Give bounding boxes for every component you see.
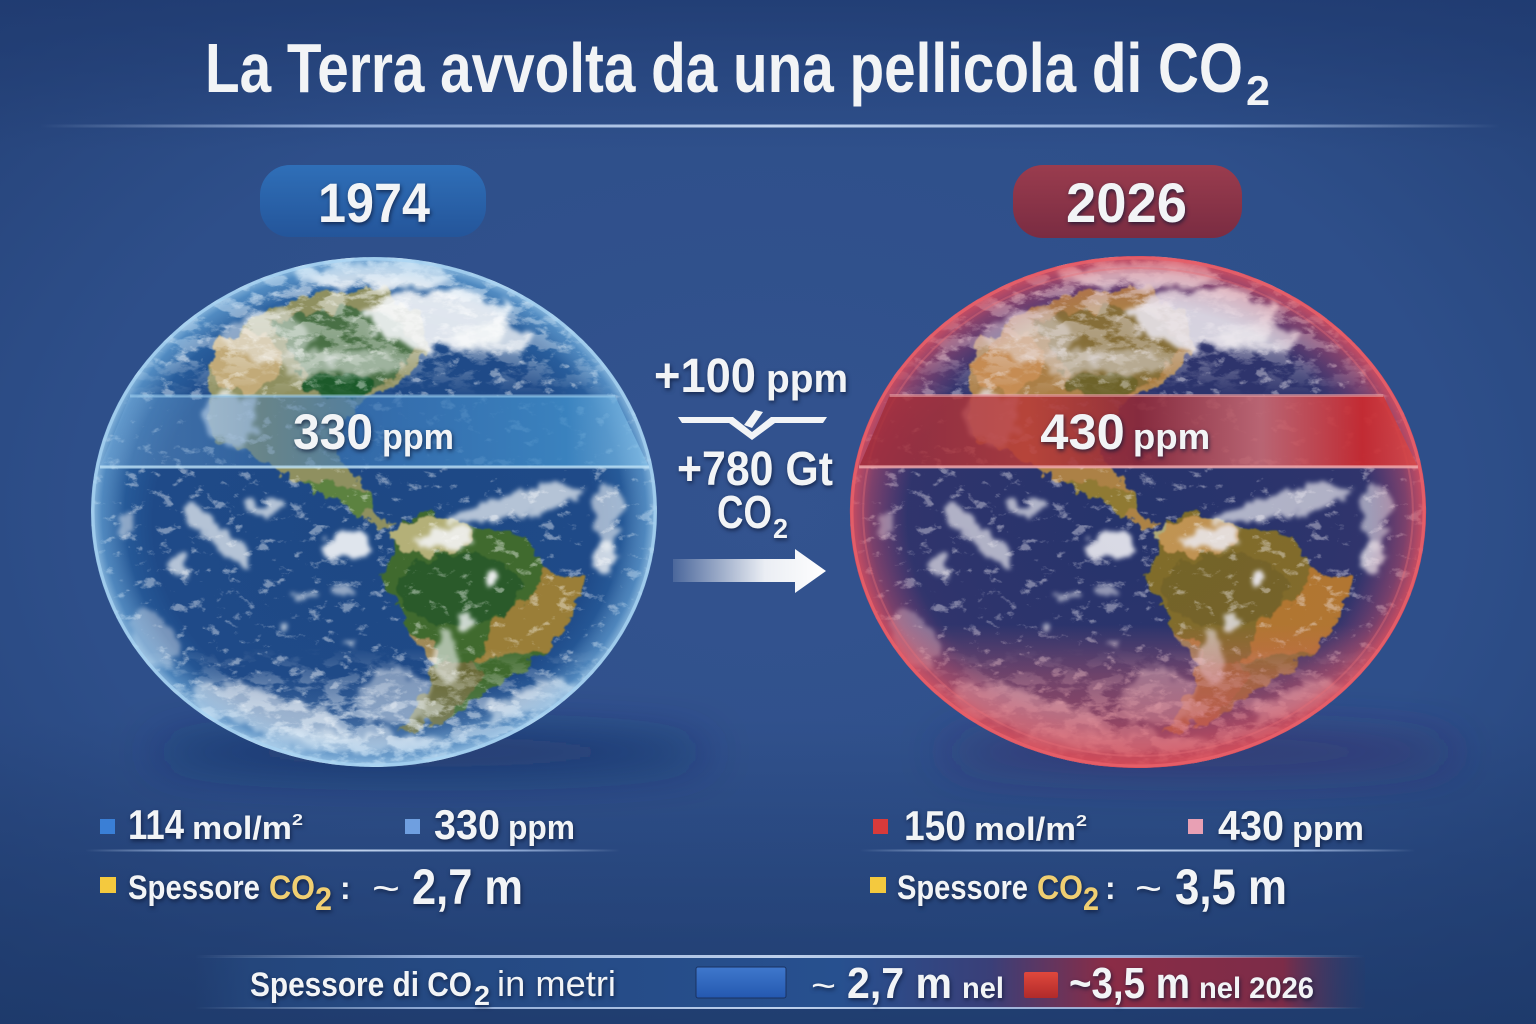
- arrow: [673, 549, 826, 593]
- thickness: :: [1105, 870, 1116, 906]
- value 1974: nel: [962, 972, 1004, 1005]
- ocean: [850, 256, 1426, 768]
- thickness: ~: [1135, 867, 1162, 911]
- value 2026: [1069, 959, 1314, 1008]
- red swatch: [1024, 972, 1058, 998]
- thickness: 2: [315, 881, 332, 917]
- chevron divider: [678, 410, 827, 440]
- mol value: mol/m: [974, 811, 1076, 847]
- ppm value: ppm: [1292, 810, 1364, 848]
- light blue marker: [405, 819, 420, 834]
- bar label: 2: [474, 980, 490, 1011]
- red tint: [850, 256, 1426, 768]
- band value: 330: [293, 404, 373, 460]
- mol value: [904, 802, 1087, 849]
- band value: 430: [1040, 403, 1125, 460]
- ppm value: [434, 801, 575, 848]
- globe 2026: [843, 251, 1433, 773]
- thickness: Spessore: [897, 869, 1028, 907]
- mol value: [128, 801, 303, 848]
- thickness: 3,5 m: [1175, 859, 1287, 915]
- mol value: 2: [1076, 813, 1087, 830]
- thickness: 2,7 m: [412, 859, 523, 915]
- bar label: in metri: [497, 963, 616, 1004]
- mol value: 114: [128, 801, 185, 848]
- year badge 2026: [1013, 165, 1242, 238]
- increase in gigatons: +780 Gt: [677, 443, 833, 496]
- thickness: CO: [269, 869, 315, 907]
- ppm value: [1218, 802, 1364, 849]
- ppm value: ppm: [508, 809, 575, 847]
- thickness: [128, 859, 523, 917]
- thickness: :: [340, 870, 351, 906]
- title: La Terra avvolta da una pellicola di CO: [205, 29, 1243, 107]
- continents and clouds: [843, 251, 1433, 773]
- ppm value: 330: [434, 801, 500, 848]
- ppm value: 430: [1218, 802, 1284, 849]
- globe 1974: [84, 252, 664, 772]
- ground shadows: [150, 734, 1460, 770]
- ppm band: [859, 396, 1418, 467]
- value 2026: ~3,5 m: [1069, 959, 1190, 1008]
- ppm band: [100, 396, 649, 467]
- increase in ppm: +100: [654, 350, 756, 403]
- red marker: [873, 819, 888, 834]
- bottom summary bar: [195, 955, 1365, 1011]
- year badge 2026: 2026: [1066, 171, 1187, 234]
- blue marker: [100, 819, 115, 834]
- continents and clouds: [84, 252, 664, 772]
- mol value: mol/m: [192, 810, 292, 846]
- legend 2026: [860, 802, 1415, 917]
- band value: [293, 404, 454, 460]
- value 2026: nel 2026: [1199, 972, 1314, 1005]
- thickness: [897, 859, 1287, 917]
- mol value: 150: [904, 802, 966, 849]
- year badge 1974: 1974: [318, 171, 430, 234]
- bar label: Spessore di CO: [250, 966, 472, 1004]
- increase in ppm: ppm: [766, 357, 848, 401]
- blue swatch: [696, 967, 786, 998]
- increase in ppm: [654, 350, 848, 403]
- increase in gigatons: [677, 443, 833, 544]
- value 1974: 2,7 m: [847, 959, 952, 1008]
- yellow marker: [870, 877, 886, 893]
- thickness: CO: [1037, 869, 1083, 907]
- yellow marker: [100, 877, 116, 893]
- increase in gigatons: 2: [773, 513, 788, 544]
- central callout: [654, 350, 848, 593]
- bar label: [250, 963, 616, 1011]
- thickness: Spessore: [128, 869, 260, 907]
- band value: [1040, 403, 1210, 460]
- value 1974: ~: [811, 965, 836, 1006]
- year badge 1974: [260, 165, 486, 237]
- mol value: 2: [292, 812, 303, 829]
- thickness: ~: [372, 867, 400, 911]
- increase in gigatons: CO: [717, 486, 772, 538]
- glass rim: [91, 257, 657, 767]
- thickness: 2: [1083, 881, 1099, 917]
- band value: ppm: [382, 416, 454, 457]
- legend 1974: [85, 801, 620, 917]
- ocean: [91, 257, 657, 767]
- band value: ppm: [1133, 416, 1210, 457]
- title: 2: [1246, 67, 1270, 114]
- value 1974: [811, 959, 1004, 1008]
- pink marker: [1188, 819, 1203, 834]
